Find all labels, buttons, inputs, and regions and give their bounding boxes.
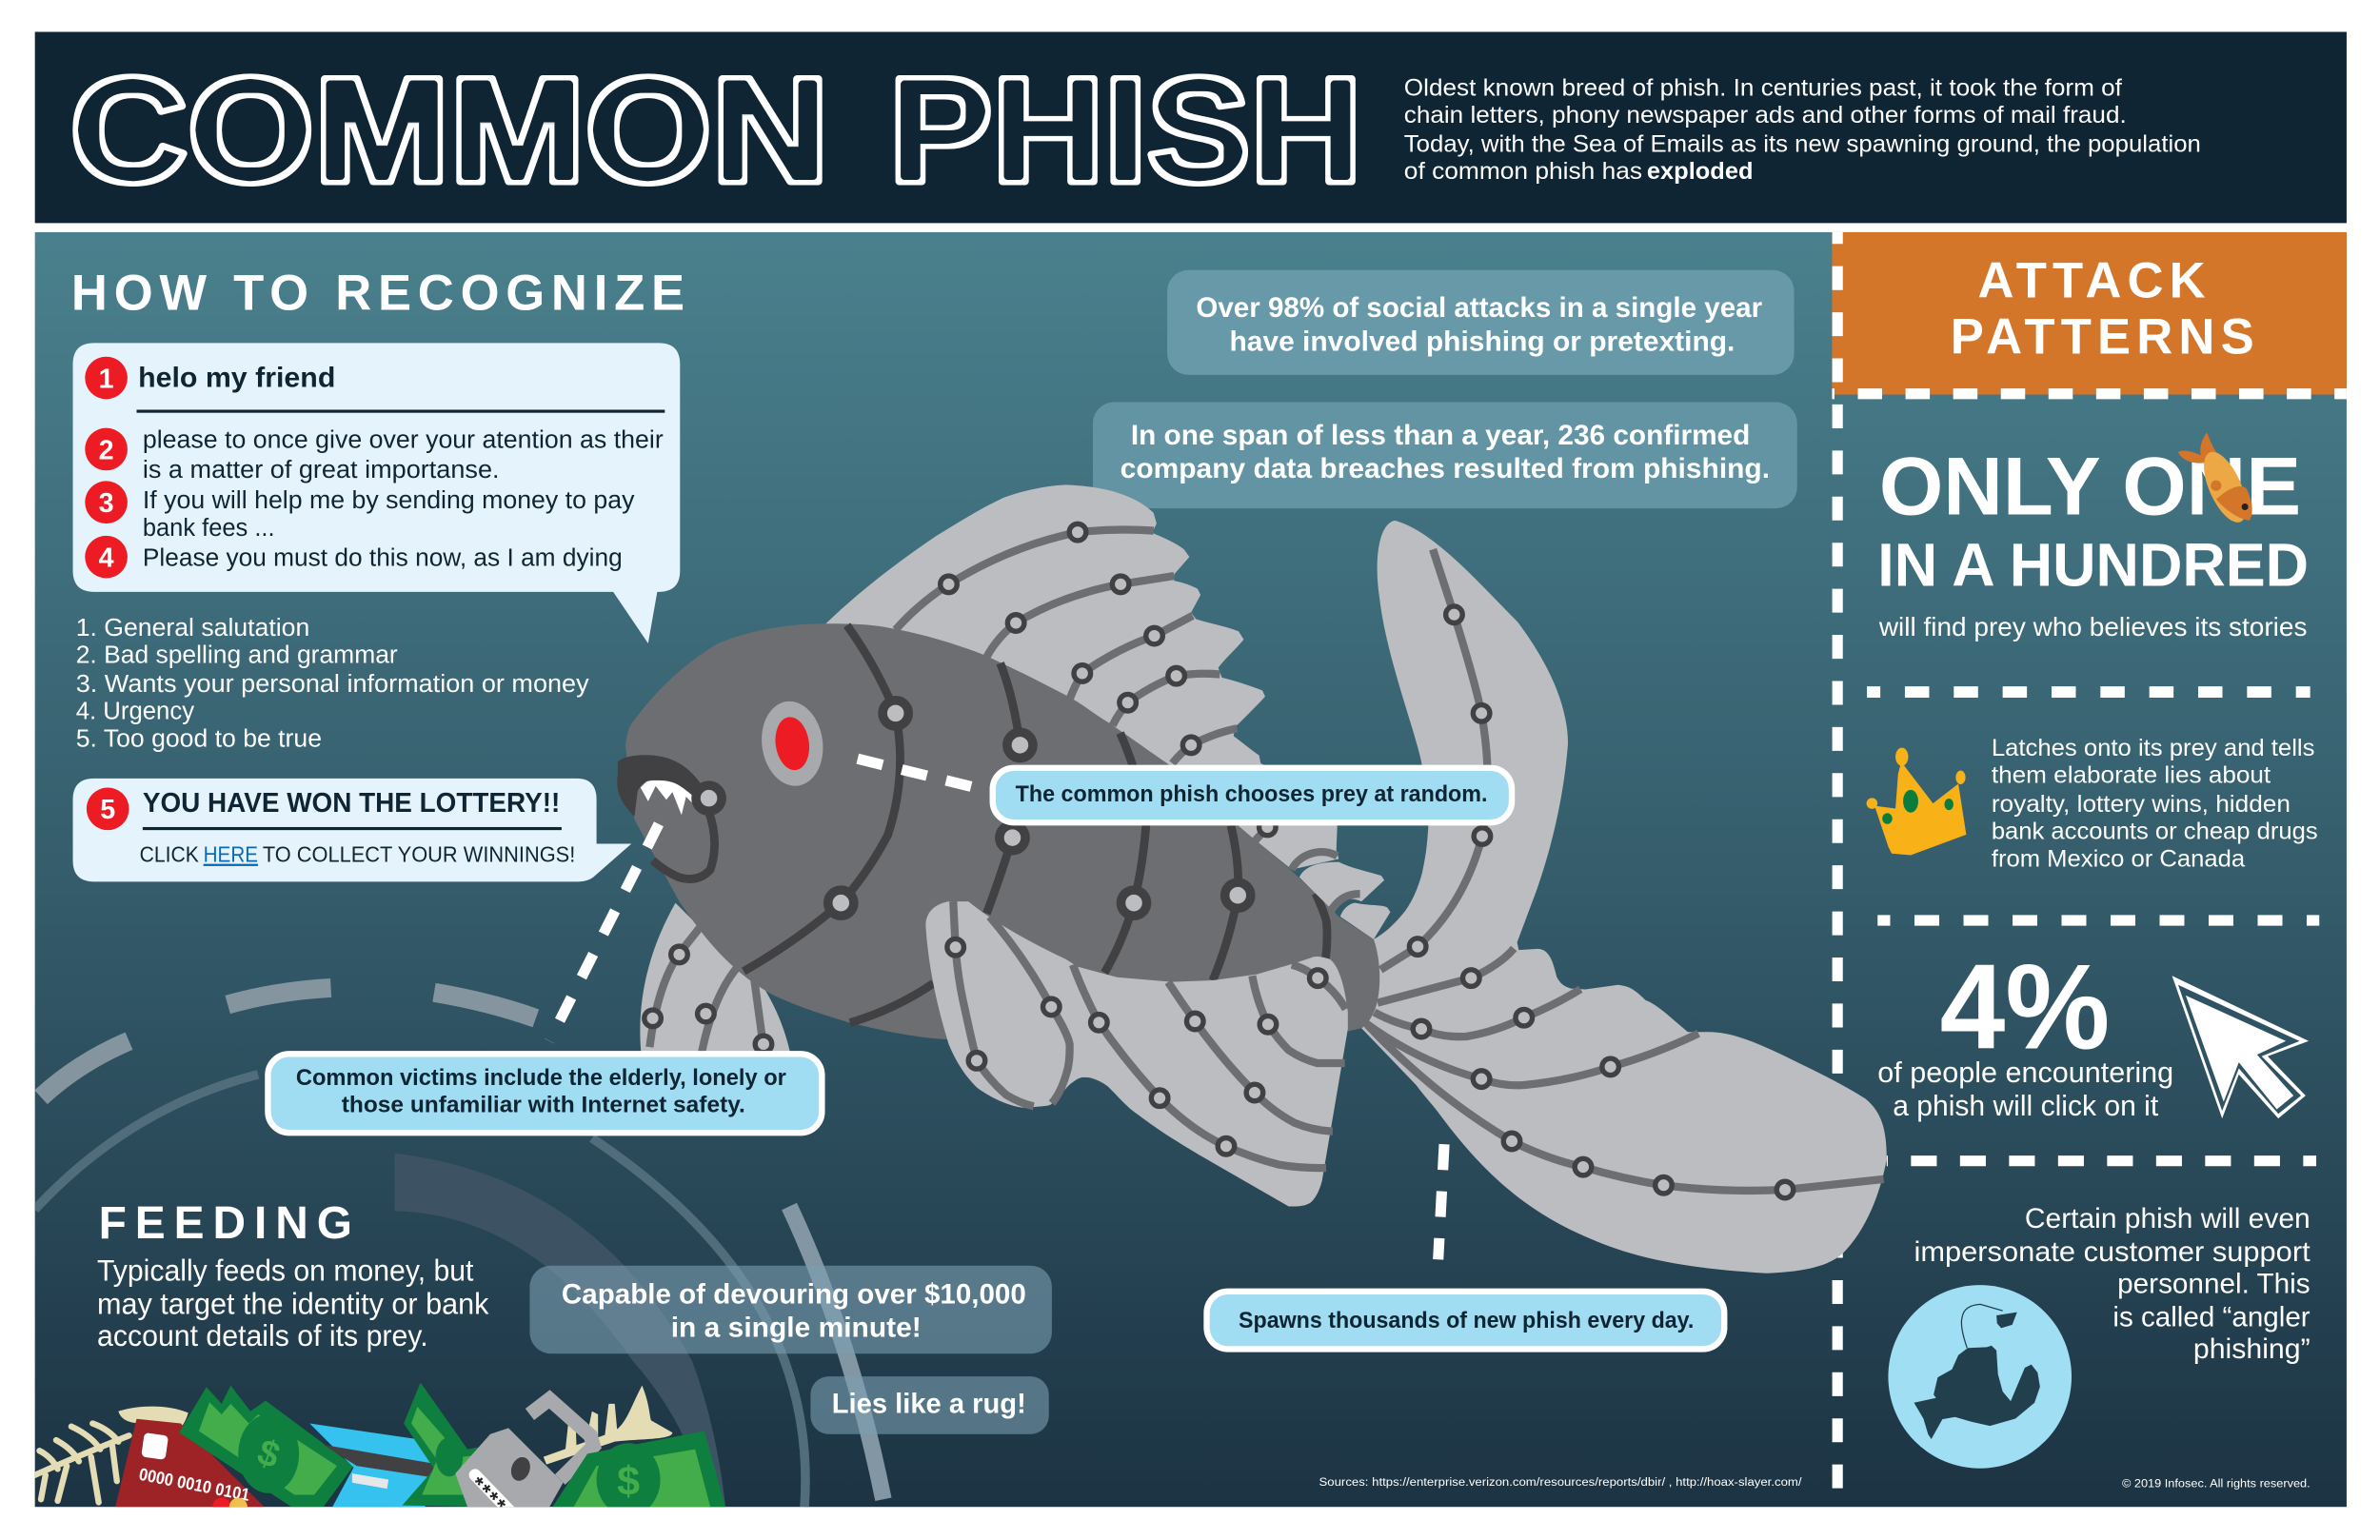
numbered list of signs — [76, 613, 589, 752]
feeding description: account details of its prey. — [97, 1319, 428, 1352]
only one in a hundred: will find prey who believes its stories — [1878, 612, 2307, 642]
header banner — [35, 31, 2347, 223]
callout: spawns — [1207, 1292, 1724, 1349]
icon: cursor arrow — [2172, 976, 2309, 1118]
callout: spawns: Spawns thousands of new phish every day. — [1239, 1308, 1694, 1333]
heading banner: attack patterns: PATTERNS — [1951, 308, 2254, 365]
column dashed dividers — [1832, 232, 2347, 1491]
fish body — [617, 623, 1379, 1039]
title — [70, 49, 1362, 214]
rear small fins — [1292, 852, 1390, 939]
copyright: © 2019 Infosec. All rights reserved. — [2122, 1477, 2311, 1491]
speech bubble: phishing email: 1 — [99, 364, 114, 394]
fish skeleton right — [544, 1386, 672, 1465]
text: elaborate lies: bank accounts or cheap drugs — [1992, 819, 2318, 845]
text: elaborate lies: from Mexico or Canada — [1992, 845, 2246, 872]
dashed pointer lines — [549, 759, 1444, 1259]
callout: prey at random: The common phish chooses prey at random. — [1016, 781, 1488, 807]
speech bubble: lottery: CLICK — [140, 842, 199, 867]
mouth — [617, 755, 722, 879]
speech bubble: phishing email: Please you must do this now, as I am dying — [143, 543, 623, 572]
belly and pectoral fins — [925, 901, 1348, 1207]
speech bubble: phishing email — [73, 343, 680, 643]
text: angler phishing: is called “angler — [2112, 1302, 2311, 1333]
eye — [756, 698, 828, 790]
text: angler phishing — [1914, 1203, 2311, 1365]
body stripes — [744, 625, 901, 971]
sources footer: Sources: https://enterprise.verizon.com/resources/reports/dbir/ , http://hoax-slayer.com/ — [1319, 1475, 1802, 1489]
icon: small orange fish — [2178, 432, 2255, 528]
title: PHISH — [889, 49, 1362, 214]
credit card red: 0000 0010 0101 — [137, 1464, 251, 1505]
text: angler phishing: personnel. This — [2117, 1268, 2311, 1299]
fish skeleton left — [35, 1407, 188, 1502]
speech bubble: lottery — [73, 779, 631, 881]
illustration: pile of prey — [35, 1382, 725, 1517]
text: elaborate lies — [1992, 735, 2318, 872]
stat: 4 percent — [1877, 940, 2173, 1122]
bank note 1: $ — [252, 1431, 285, 1477]
header description: exploded — [1647, 159, 1754, 185]
dorsal fin — [825, 484, 1339, 870]
feeding description — [97, 1254, 489, 1352]
only one in a hundred: ONLY ONE — [1879, 442, 2301, 533]
numbered list of signs: 2. Bad spelling and grammar — [76, 641, 398, 669]
heading banner: attack patterns: ATTACK — [1977, 253, 2206, 309]
bank note 3: $ — [617, 1458, 640, 1504]
title: COMMON — [70, 49, 829, 214]
stat box: data breaches: company data breaches resulted from phishing. — [1121, 453, 1770, 484]
callout: common victims — [268, 1054, 822, 1133]
stat box: social attacks — [1167, 270, 1795, 375]
stat: 4 percent: of people encountering — [1877, 1057, 2173, 1089]
text: elaborate lies: Latches onto its prey and tells — [1992, 735, 2314, 761]
heading: how to recognize: HOW TO RECOGNIZE — [71, 265, 684, 321]
bank note 2 — [403, 1382, 508, 1507]
stat box: data breaches: In one span of less than a year, 236 confirmed — [1131, 420, 1750, 451]
icon: anglerfish badge — [1888, 1285, 2072, 1469]
stat box: lies like a rug: Lies like a rug! — [832, 1388, 1026, 1419]
heading: feeding: FEEDING — [99, 1198, 352, 1249]
text: angler phishing: phishing” — [2193, 1333, 2311, 1365]
heading banner: attack patterns — [1832, 232, 2347, 395]
credit card red — [115, 1419, 264, 1516]
speech bubble: phishing email: 3 — [99, 488, 114, 519]
stat box: lies like a rug — [810, 1376, 1049, 1434]
speech bubble: phishing email: If you will help me by sending money to pay — [143, 485, 635, 514]
speech bubble: phishing email: please to once give over your atention as their — [143, 424, 664, 453]
header description: of common phish has — [1404, 159, 1642, 185]
numbered list of signs: 4. Urgency — [76, 697, 195, 725]
header description: Oldest known breed of phish. In centuries past, it took the form of — [1404, 75, 2122, 101]
stat box: devouring: in a single minute! — [671, 1313, 922, 1344]
speech bubble: phishing email: is a matter of great importanse. — [143, 455, 500, 484]
icon: crown — [1867, 748, 1966, 855]
header description: chain letters, phony newspaper ads and other forms of mail fraud. — [1404, 103, 2127, 128]
speech bubble: lottery: HERE — [204, 842, 258, 867]
speech bubble: phishing email: bank fees ... — [143, 513, 275, 542]
feeding description: may target the identity or bank — [97, 1288, 489, 1321]
bank note 1 — [179, 1386, 353, 1507]
speech bubble: phishing email: helo my friend — [138, 363, 335, 394]
padlock: **** — [466, 1472, 510, 1517]
tail fin — [1351, 521, 1887, 1273]
illustration: fish — [617, 484, 1887, 1273]
speech bubble: phishing email: 2 — [99, 435, 114, 465]
stat box: social attacks: Over 98% of social attacks in a single year — [1196, 292, 1763, 324]
speech bubble: lottery: TO COLLECT YOUR WINNINGS! — [263, 842, 575, 867]
callout: prey at random — [993, 768, 1512, 822]
callout: common victims: Common victims include the elderly, lonely or — [296, 1065, 786, 1091]
speech bubble: lottery: YOU HAVE WON THE LOTTERY!! — [143, 788, 560, 819]
stat: 4 percent: 4% — [1940, 940, 2110, 1076]
callout: common victims: those unfamiliar with Internet safety. — [342, 1093, 745, 1118]
text: angler phishing: impersonate customer support — [1914, 1236, 2311, 1268]
header description — [1404, 75, 2201, 185]
header description: Today, with the Sea of Emails as its new spawning ground, the population — [1404, 131, 2201, 157]
text: elaborate lies: royalty, lottery wins, hidden — [1992, 791, 2291, 818]
stat: 4 percent: a phish will click on it — [1893, 1091, 2159, 1122]
bank note 3 — [552, 1431, 725, 1508]
left ventral fin — [640, 903, 792, 1062]
panel: how to recognize — [71, 265, 684, 881]
padlock — [455, 1399, 593, 1517]
stat box: data breaches — [1093, 403, 1797, 508]
text: elaborate lies: them elaborate lies about — [1992, 762, 2271, 789]
stat box: social attacks: have involved phishing or pretexting. — [1229, 326, 1735, 357]
only one in a hundred: IN A HUNDRED — [1877, 530, 2309, 599]
only one in a hundred — [1877, 442, 2309, 642]
numbered list of signs: 5. Too good to be true — [76, 723, 322, 752]
feeding description: Typically feeds on money, but — [97, 1254, 474, 1288]
numbered list of signs: 3. Wants your personal information or money — [76, 669, 589, 698]
illustration: attack patterns column — [1832, 232, 2347, 1491]
speech bubble: phishing email: 4 — [99, 543, 114, 574]
stat box: devouring: Capable of devouring over $10,000 — [562, 1279, 1026, 1311]
bank card blue — [309, 1424, 442, 1507]
panel: feeding — [97, 1198, 489, 1352]
text: angler phishing: Certain phish will even — [2025, 1203, 2311, 1234]
speech bubble: lottery: 5 — [100, 795, 115, 825]
numbered list of signs: 1. General salutation — [76, 613, 309, 642]
background sonar arcs — [35, 988, 883, 1507]
stat box: devouring — [529, 1266, 1052, 1353]
